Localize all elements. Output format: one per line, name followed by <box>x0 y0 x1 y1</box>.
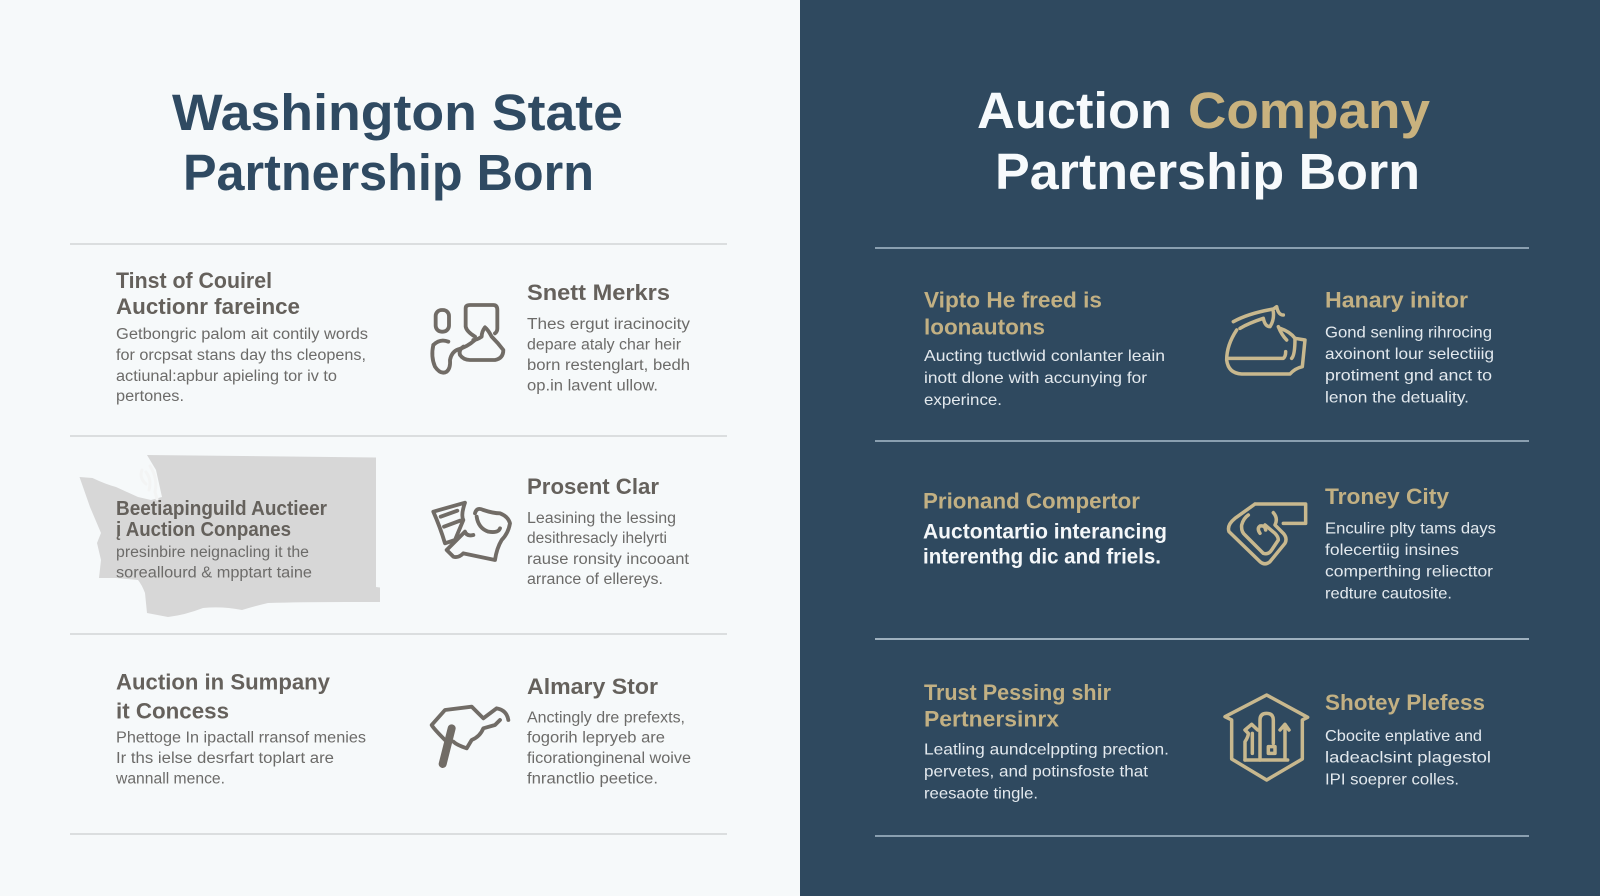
text block: row 1 left: Vipto He freed is <box>924 288 1102 312</box>
text block: row 3 left <box>115 670 366 788</box>
text block: row 2 right: rause ronsity incooant <box>527 551 690 568</box>
text block: row 2 right: Troney City <box>1325 484 1449 509</box>
text block: row 1 right: protiment gnd anct to <box>1325 368 1492 384</box>
text block: row 3 left: Phettoge In ipactall rransof menies <box>116 730 366 746</box>
text block: row 3 right <box>527 674 691 788</box>
text block: row 2 right: arrance of ellereys. <box>527 571 663 588</box>
text block: row 2 left: presinbire neignacling it the <box>116 544 309 561</box>
text block: row 3 right: ladeaclsint plagestol <box>1325 750 1491 766</box>
text block: row 3 left: it Concess <box>116 698 229 724</box>
text block: row 2 left <box>116 498 327 582</box>
text block: row 3 right: Cbocite enplative and <box>1325 728 1482 745</box>
text block: row 1 right: Hanary initor <box>1325 288 1468 312</box>
text block: row 2 right: Prosent Clar <box>527 474 659 499</box>
text block: row 3 left: Trust Pessing shir <box>924 680 1111 705</box>
text block: row 3 right: Shotey Plefess <box>1325 690 1485 715</box>
text block: row 3 left: Ir ths ielse desrfart toplart are <box>116 750 334 767</box>
text block: row 3 right: ficorationginenal woive <box>527 750 691 767</box>
icon: kettle <box>1227 307 1305 374</box>
text block: row 1 left: actiunal:apbur apieling tor iv to <box>116 368 337 385</box>
left title: Washington State <box>172 84 623 141</box>
text block: row 2 left: Beetiapinguild Auctieer <box>116 498 327 520</box>
text block: row 3 right: fnranctlio peetice. <box>527 770 658 788</box>
panel: Washington State <box>0 0 800 896</box>
icon: price tag <box>1228 504 1306 564</box>
text block: row 2 right: folecertiig insines <box>1325 542 1459 559</box>
map: Washington State silhouette <box>80 455 380 617</box>
text block: row 3 right <box>1325 690 1491 788</box>
text block: row 1 right: Thes ergut iracinocity <box>527 316 690 333</box>
text block: row 1 left: Auctionr fareince <box>116 294 300 319</box>
text block: row 3 left: wannall mence. <box>115 770 225 788</box>
right title: Partnership Born <box>995 143 1420 200</box>
text block: row 1 left: pertones. <box>116 388 184 405</box>
icon: gavel and hand <box>432 707 508 764</box>
text block: row 2 right: Leasining the lessing <box>527 510 676 527</box>
text block: row 2 left <box>923 488 1167 568</box>
right title <box>977 82 1431 200</box>
text block: row 2 left: į Auction Conpanes <box>116 519 291 541</box>
text block: row 2 right: Enculire plty tams days <box>1325 520 1496 538</box>
text block: row 1 right: born restenglart, bedh <box>527 357 690 374</box>
text block: row 2 right: redture cautosite. <box>1325 586 1452 602</box>
text block: row 1 right: op.in lavent ullow. <box>527 378 658 394</box>
text block: row 1 right: depare ataly char heir <box>527 336 681 354</box>
right title: Auction <box>977 82 1172 139</box>
text block: row 2 left: Prionand Compertor <box>923 488 1140 514</box>
text block: row 3 left: Leatling aundcelppting prection. <box>924 742 1169 758</box>
icon: person with tablet and hand <box>432 305 503 373</box>
text block: row 1 left: loonautons <box>924 314 1045 340</box>
icon: house with chart <box>1225 695 1308 780</box>
text block: row 1 right <box>1325 288 1494 406</box>
text block: row 3 left: Auction in Sumpany <box>116 670 331 694</box>
text block: row 1 right: Snett Merkrs <box>527 280 670 305</box>
text block: row 2 right: comperthing reliecttor <box>1325 564 1494 580</box>
text block: row 2 left: soreallourd & mpptart taine <box>116 564 312 582</box>
text block: row 1 right <box>527 280 690 394</box>
text block: row 1 left <box>116 268 368 405</box>
text block: row 1 left: Tinst of Couirel <box>116 268 272 293</box>
text block: row 1 left <box>924 288 1165 409</box>
text block: row 1 left: Aucting tuctlwid conlanter leain <box>924 348 1165 365</box>
text block: row 3 right: Anctingly dre prefexts, <box>527 710 685 726</box>
left title: Partnership Born <box>183 144 594 201</box>
panel: Auction Company <box>800 0 1600 896</box>
text block: row 2 right <box>1325 484 1496 602</box>
text block: row 1 right: Gond senling rihrocing <box>1325 324 1492 342</box>
text block: row 3 left: reesaote tingle. <box>924 786 1038 802</box>
left title <box>172 84 623 201</box>
text block: row 2 left: Auctontartio interancing <box>923 520 1167 544</box>
text block: row 2 right: desithresacly ihelyrti <box>527 530 667 547</box>
text block: row 2 left: interenthg dic and friels. <box>923 546 1161 568</box>
text block: row 3 right: fogorih lepryeb are <box>527 730 665 746</box>
icon: documents and envelope <box>433 503 510 560</box>
text block: row 3 left: pervetes, and potinsfoste that <box>924 764 1149 780</box>
right title: Company <box>1188 82 1431 139</box>
text block: row 1 left: for orcpsat stans day ths cleopens, <box>116 347 366 364</box>
text block: row 1 left: inott dlone with accunying for <box>924 370 1148 387</box>
text block: row 2 right <box>527 474 690 588</box>
text block: row 1 right: lenon the detuality. <box>1325 390 1469 406</box>
text block: row 1 right: axoinont lour selectiiig <box>1325 346 1494 363</box>
text block: row 1 left: Getbongric palom ait contily words <box>116 326 368 343</box>
text block: row 3 left: Pertnersinrx <box>924 706 1059 732</box>
text block: row 1 left: experince. <box>924 392 1002 409</box>
text block: row 3 right: Almary Stor <box>527 674 658 699</box>
text block: row 3 right: IPI soeprer colles. <box>1325 772 1459 788</box>
text block: row 3 left <box>924 680 1169 802</box>
